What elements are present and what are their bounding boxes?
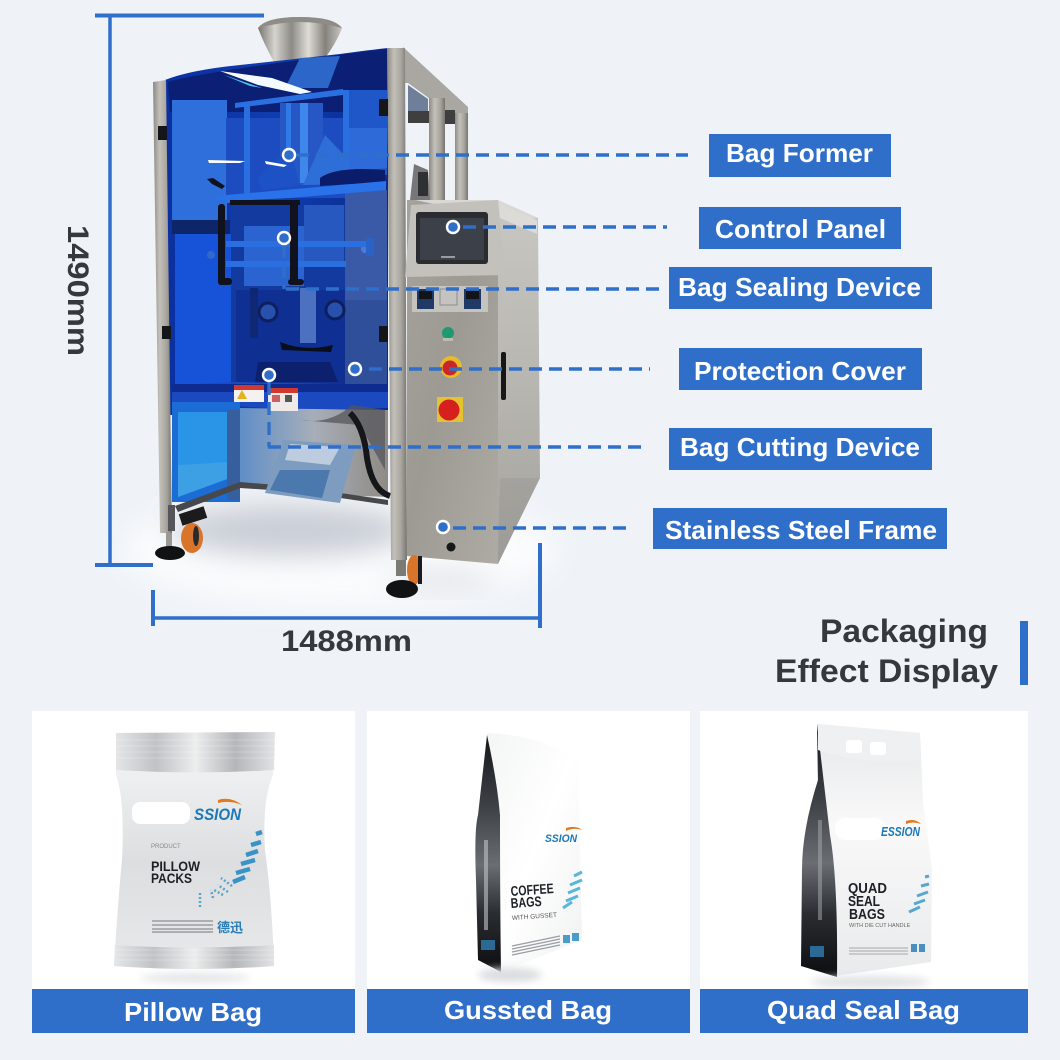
heading: Packaging Effect Display	[775, 613, 1028, 689]
callout: Bag Former: Bag Former	[726, 138, 873, 168]
quad seal bag illustration: QUAD	[848, 881, 887, 897]
panel: Pillow Bag	[32, 711, 355, 1033]
callout: Bag Cutting Device: Bag Cutting Device	[680, 432, 920, 462]
machine	[153, 17, 540, 598]
black handles	[207, 178, 304, 285]
callout: Bag Sealing Device: Bag Sealing Device	[678, 272, 921, 302]
chute plate	[265, 440, 356, 503]
pillow bag illustration	[114, 732, 275, 983]
dimension: width	[153, 543, 540, 658]
dimension: height: 1490mm	[61, 225, 94, 356]
right post	[387, 48, 407, 560]
quad seal bag illustration	[801, 724, 932, 988]
gusset bag illustration: COFFEE	[510, 880, 554, 899]
callout: Stainless Steel Frame: Stainless Steel Frame	[665, 515, 937, 545]
callout: Protection Cover	[349, 348, 922, 390]
dimension: height	[61, 15, 264, 565]
pillow bag illustration: SSION	[194, 805, 242, 824]
hopper	[258, 17, 342, 62]
drain hole	[446, 542, 456, 552]
blue protection cover	[165, 48, 388, 415]
sealing rollers	[250, 288, 344, 382]
front band	[172, 382, 388, 410]
casters left	[155, 505, 207, 560]
heading: Packaging Effect Display: Packaging	[820, 613, 988, 649]
quad seal bag illustration: ESSION	[881, 824, 920, 839]
rear frame	[403, 47, 468, 201]
callout: Bag Cutting Device	[263, 369, 932, 470]
mechanism: plates, columns, tube	[215, 89, 386, 267]
callout: Bag Former	[283, 134, 891, 177]
panel: Quad Seal Bag: Quad Seal Bag	[767, 995, 960, 1025]
right caster	[386, 555, 422, 598]
panel: Gussted Bag: Gussted Bag	[444, 995, 612, 1025]
quad seal bag illustration: SEAL	[848, 894, 880, 910]
pillow bag illustration: PACKS	[151, 870, 192, 886]
heading: Packaging Effect Display: Effect Display	[775, 653, 998, 689]
panel: Pillow Bag: Pillow Bag	[124, 997, 262, 1027]
emergency stop	[440, 356, 462, 378]
temperature displays	[412, 286, 488, 312]
lower compartment	[172, 402, 388, 512]
cable	[350, 413, 390, 496]
control cabinet	[405, 200, 540, 564]
gusset bag illustration	[475, 733, 582, 982]
panel: Gussted Bag	[367, 711, 690, 1033]
touch screen	[416, 212, 488, 264]
callout: Protection Cover: Protection Cover	[694, 356, 906, 386]
dimension: width: 1488mm	[281, 625, 412, 658]
pillow bag illustration: PRODUCT	[151, 844, 181, 850]
callout: Stainless Steel Frame	[437, 508, 947, 549]
glare	[208, 71, 312, 167]
quad seal bag illustration: BAGS	[849, 907, 885, 923]
green power button	[442, 327, 454, 341]
gusset bag illustration: BAGS	[510, 893, 542, 911]
red rotary switch	[437, 397, 463, 422]
gusset bag illustration: WITH GUSSET	[512, 912, 557, 922]
gusset bag illustration: SSION	[545, 833, 578, 845]
door handle	[501, 352, 506, 400]
callout: Control Panel	[447, 207, 901, 249]
callout: Control Panel: Control Panel	[715, 214, 886, 244]
panel: Quad Seal Bag	[700, 711, 1028, 1033]
warning labels	[234, 385, 298, 411]
quad seal bag illustration: WITH DIE CUT HANDLE	[849, 923, 911, 929]
pillow bag illustration: 德迅	[217, 920, 243, 935]
callout: Bag Sealing Device	[278, 232, 932, 309]
pillow bag illustration: PILLOW	[151, 858, 201, 874]
hinges	[158, 99, 388, 342]
left post	[153, 80, 172, 533]
